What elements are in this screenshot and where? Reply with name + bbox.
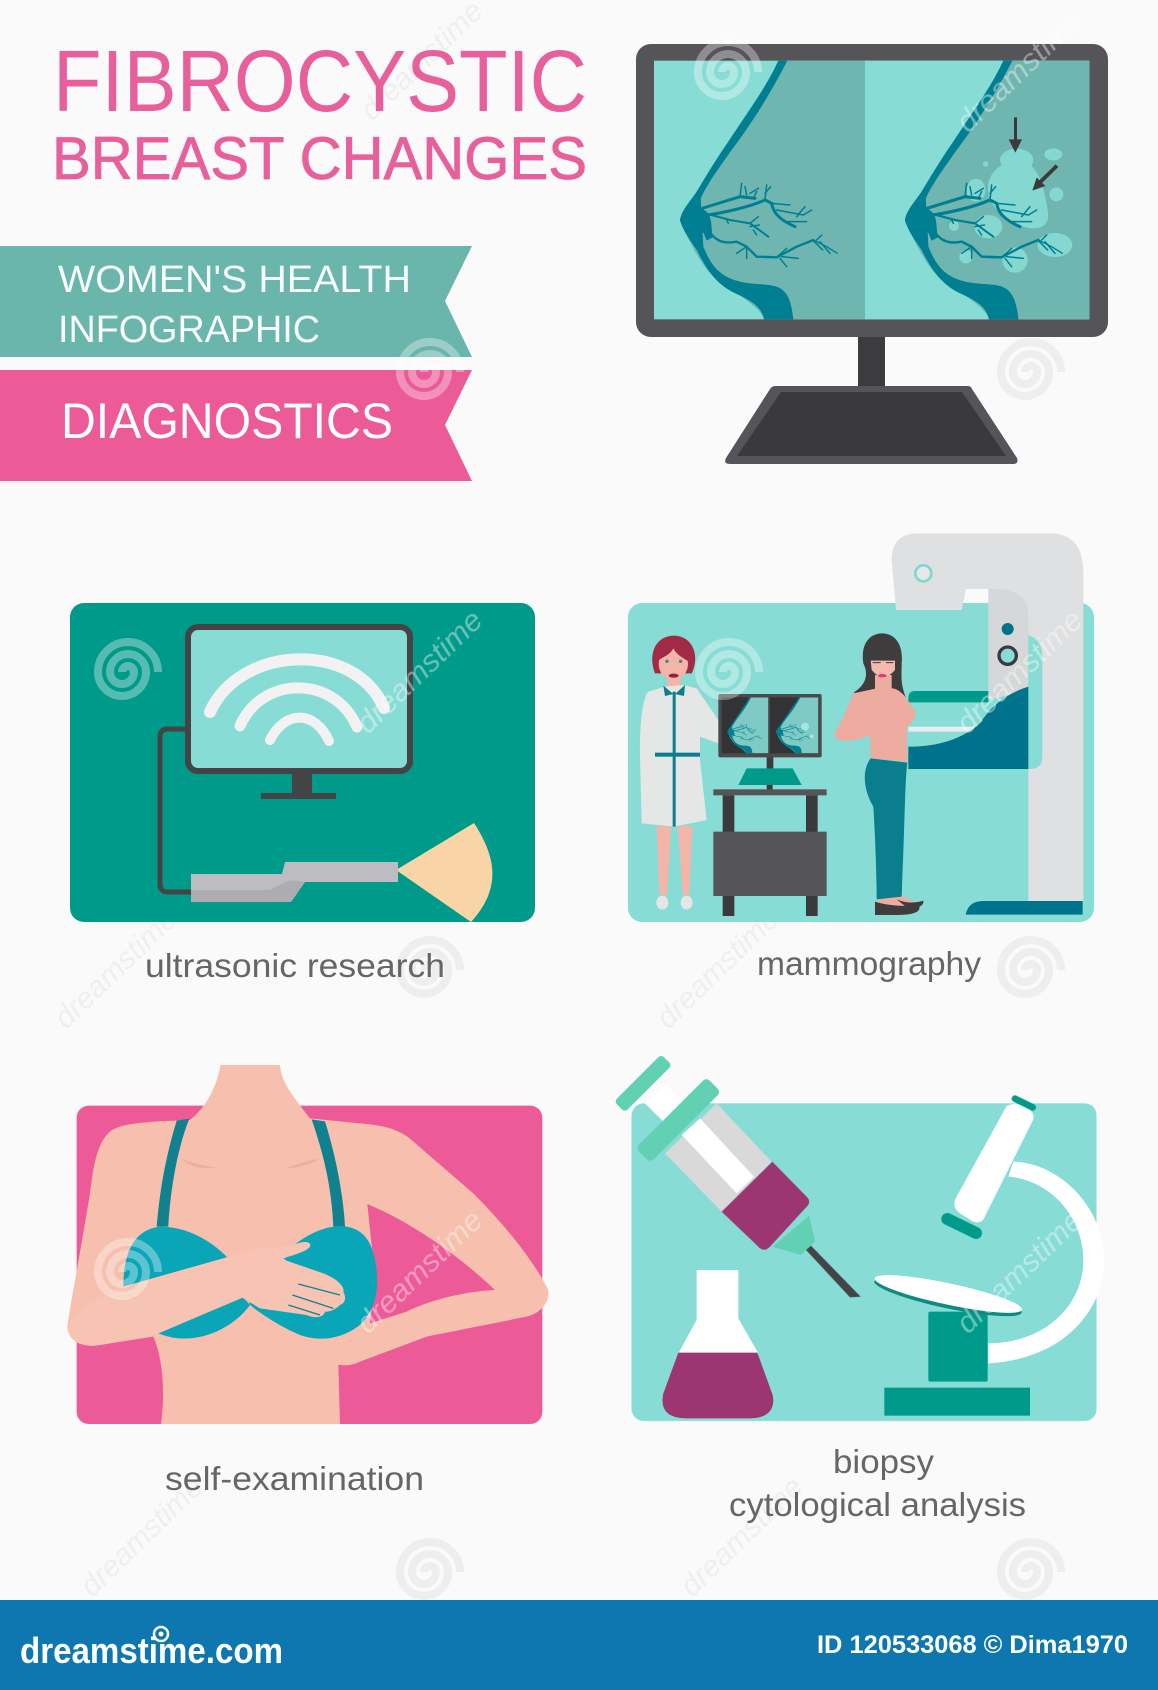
mammography machine	[892, 533, 1083, 915]
doctor	[640, 636, 718, 910]
footer logo: dreamstime.com	[20, 1630, 283, 1671]
arm and hand	[67, 1242, 345, 1346]
desk with small monitor	[713, 694, 827, 916]
watermark text	[349, 1, 1089, 1340]
right mammogram with cysts	[905, 61, 1090, 319]
watermark text: dreamstime	[949, 602, 1089, 740]
left mammogram	[680, 61, 865, 319]
caption: self-examination: self-examination	[165, 1460, 424, 1497]
ribbon: women's health infographic	[0, 246, 472, 357]
caption: biopsy and cytological analysis: biopsy	[833, 1443, 935, 1480]
footer bar	[0, 1600, 1158, 1690]
ultrasound waves	[210, 659, 384, 741]
panel: self-examination	[67, 1065, 549, 1424]
flask	[662, 1270, 773, 1418]
ribbon: women's health infographic: INFOGRAPHIC	[58, 309, 320, 351]
mammogram screen	[654, 61, 1090, 319]
panel: mammography	[628, 533, 1094, 922]
ribbon: diagnostics: DIAGNOSTICS	[61, 393, 393, 449]
ribbon: diagnostics	[0, 370, 472, 481]
panel: ultrasonic research	[70, 603, 535, 922]
title	[52, 33, 587, 192]
caption: biopsy and cytological analysis: cytological analysis	[729, 1486, 1026, 1523]
ultrasound probe	[191, 862, 398, 902]
caption: biopsy and cytological analysis	[729, 1443, 1026, 1523]
watermark spirals	[98, 42, 759, 1296]
caption: ultrasonic research: ultrasonic research	[145, 947, 445, 984]
background watermarks: dreamstime	[650, 902, 786, 1035]
ribbon: women's health infographic: WOMEN'S HEALTH	[58, 259, 411, 301]
footer credit: ID 120533068 © Dima1970	[817, 1631, 1128, 1659]
caption: mammography: mammography	[757, 945, 982, 982]
background watermarks: dreamstime	[674, 1470, 810, 1603]
collarbones	[180, 1158, 321, 1168]
background watermarks	[48, 0, 810, 1603]
ultrasound monitor	[188, 627, 410, 799]
ultrasound beam	[396, 823, 492, 922]
large monitor with mammograms	[636, 44, 1108, 464]
arrow: diagonal	[1032, 164, 1058, 191]
background watermarks: dreamstime	[48, 902, 184, 1035]
background watermarks: dreamstime	[74, 1470, 210, 1603]
title: FIBROCYSTIC	[53, 33, 587, 130]
watermark spirals on background	[400, 342, 1061, 1596]
watermark text: dreamstime	[949, 1202, 1089, 1340]
patient	[834, 633, 923, 915]
armpit gap	[367, 1204, 495, 1323]
bra cups	[123, 1226, 377, 1339]
body	[67, 1065, 549, 1424]
title: BREAST CHANGES	[52, 125, 587, 192]
syringe	[614, 1054, 861, 1297]
watermark text: dreamstime	[949, 1, 1089, 139]
monitor stand	[725, 336, 1018, 464]
ultrasound cable	[160, 729, 192, 892]
watermark text: dreamstime	[349, 1202, 489, 1340]
watermark text: dreamstime	[349, 602, 489, 740]
finger lines	[288, 1284, 340, 1315]
panel: biopsy	[614, 1054, 1104, 1421]
microscope	[872, 1099, 1104, 1416]
arrow: down	[1009, 117, 1022, 153]
bra straps	[157, 1119, 345, 1227]
